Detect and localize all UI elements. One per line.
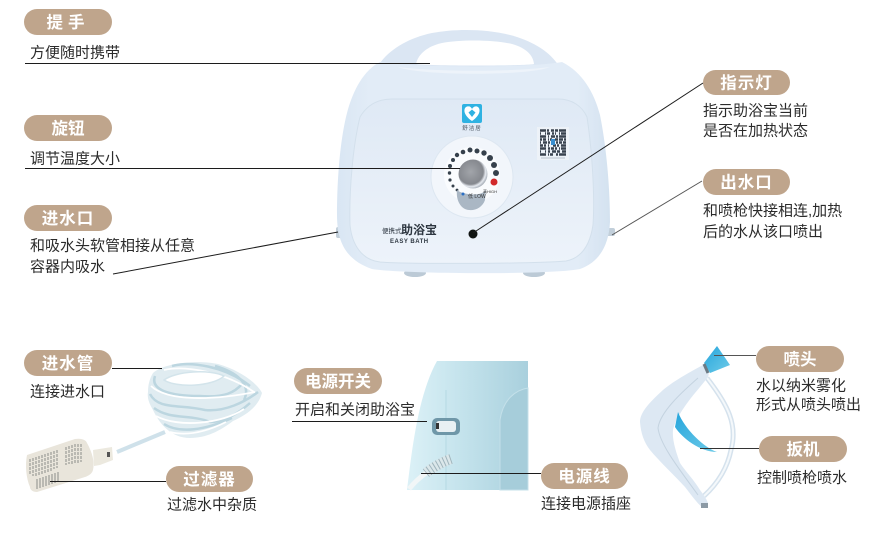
label: nozzle: 水以纳米雾化 <box>756 378 846 394</box>
brand text <box>382 222 437 245</box>
label: water inlet: 容器内吸水 <box>30 258 105 276</box>
body shell <box>337 62 610 273</box>
logo: 舒洁居 <box>462 124 482 132</box>
spray gun <box>640 346 733 508</box>
front panel outline <box>350 99 594 263</box>
label: knob: 旋钮 <box>52 118 85 138</box>
label: intake hose <box>24 350 162 400</box>
gun body <box>640 365 709 507</box>
label: indicator light: 是否在加热状态 <box>703 122 808 140</box>
label: indicator light <box>473 70 808 233</box>
label: power switch: 开启和关闭助浴宝 <box>295 402 415 418</box>
label: knob <box>24 115 460 168</box>
trigger guard <box>704 378 733 496</box>
label: water inlet: 和吸水头软管相接从任意 <box>30 236 195 254</box>
label: handle: 提手 <box>46 12 90 32</box>
label: water outlet: 后的水从该口喷出 <box>703 224 823 240</box>
handle base band <box>398 67 550 74</box>
handle opening <box>416 40 534 66</box>
label: indicator light: 指示助浴宝当前 <box>703 102 808 120</box>
label: nozzle <box>714 346 861 414</box>
intake hose coil <box>117 362 262 452</box>
label: trigger <box>700 436 847 486</box>
label: water inlet <box>24 205 338 276</box>
filter <box>26 439 113 492</box>
label: nozzle: 形式从喷头喷出 <box>756 396 861 414</box>
label: handle <box>24 9 430 64</box>
brand text: 便携式 <box>382 226 402 235</box>
dial <box>431 136 513 218</box>
label: filter: 过滤水中杂质 <box>167 496 257 514</box>
logo <box>462 104 482 132</box>
brand text: EASY BATH <box>390 239 429 245</box>
brand text: 助浴宝 <box>401 222 437 237</box>
QR code <box>537 127 569 160</box>
indicator light <box>468 230 478 238</box>
side photo: switch and cable <box>407 361 528 490</box>
label: handle: 方便随时携带 <box>30 44 120 62</box>
label: power switch <box>292 368 427 422</box>
label: knob: 调节温度大小 <box>30 150 120 168</box>
label: intake hose: 连接进水口 <box>30 384 105 400</box>
feet <box>404 269 545 277</box>
device: bath helper main unit <box>336 30 615 277</box>
power switch <box>432 418 460 435</box>
label: power cord: 电源线 <box>558 467 611 486</box>
power cord <box>409 459 451 489</box>
dial: 低 LOW <box>468 193 486 200</box>
label: filter <box>50 466 257 514</box>
label: intake hose: 进水管 <box>42 353 94 373</box>
trigger <box>675 412 717 452</box>
label: power cord <box>421 463 631 512</box>
label: nozzle: 喷头 <box>784 350 816 369</box>
handle <box>378 30 560 68</box>
label: power switch: 电源开关 <box>305 372 372 391</box>
dial: 高HIGH <box>483 188 497 194</box>
label: trigger: 控制喷枪喷水 <box>757 470 847 486</box>
label: indicator light: 指示灯 <box>720 74 773 92</box>
label: filter: 过滤器 <box>183 470 236 489</box>
label: power cord: 连接电源插座 <box>541 496 631 512</box>
label: water inlet: 进水口 <box>42 209 94 228</box>
water ports <box>336 227 615 238</box>
label: trigger: 扳机 <box>786 440 820 459</box>
label: water outlet: 和喷枪快接相连,加热 <box>703 202 842 220</box>
label: water outlet <box>612 169 842 240</box>
nozzle <box>704 346 730 373</box>
label: water outlet: 出水口 <box>720 173 773 192</box>
